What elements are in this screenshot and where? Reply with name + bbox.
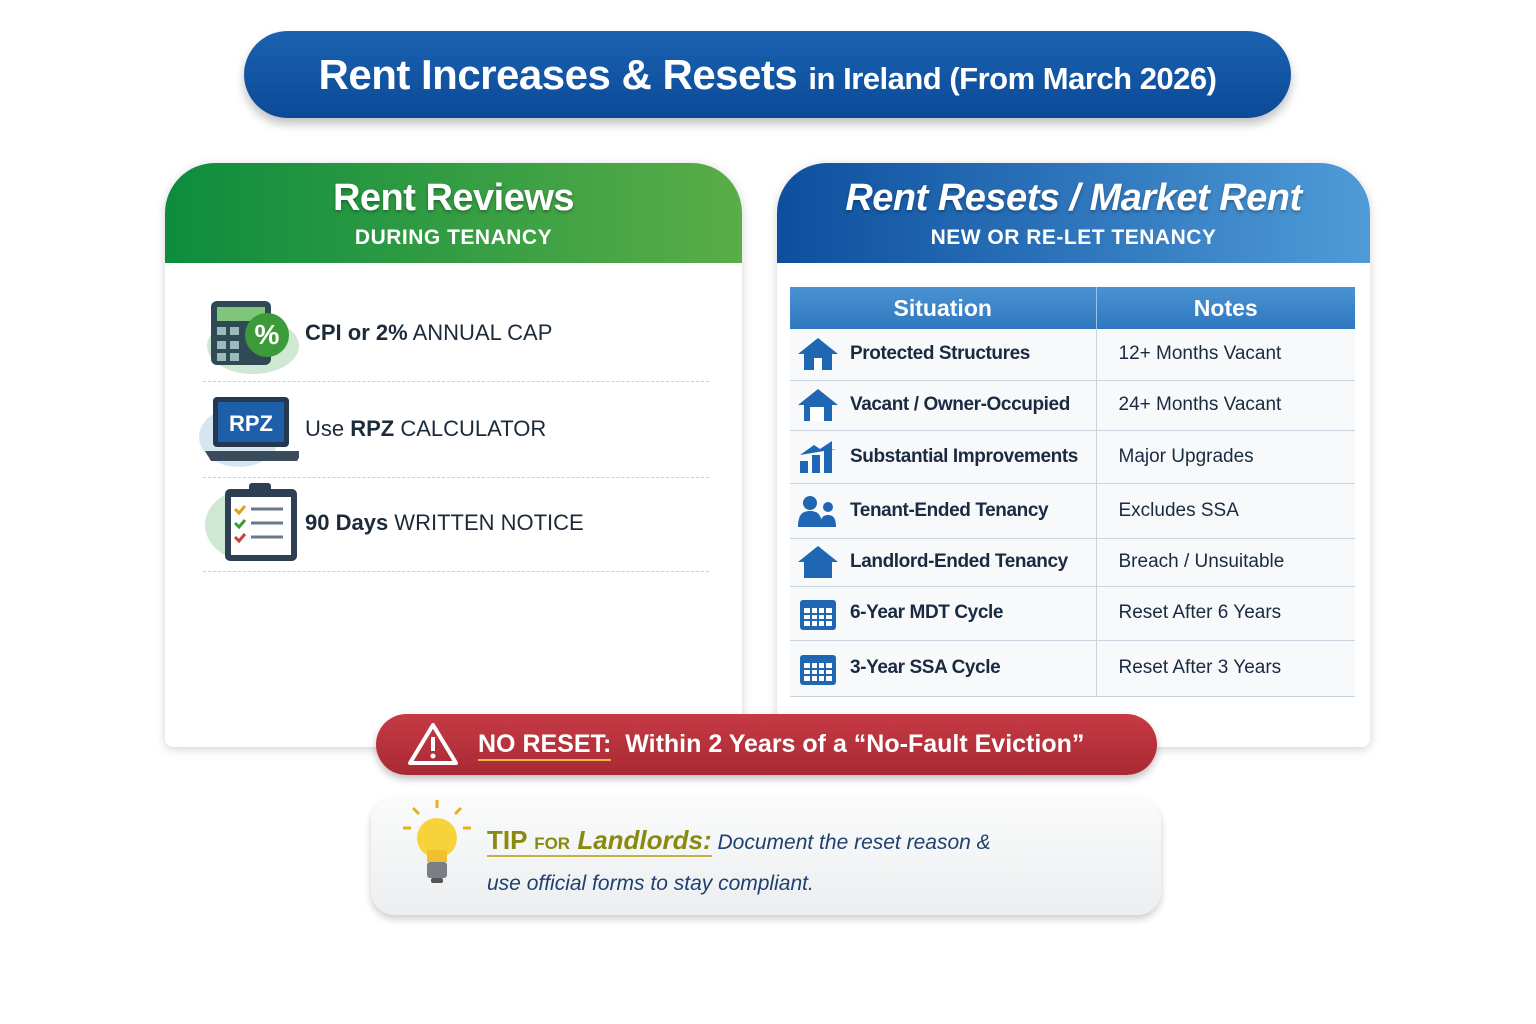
table: situations: Landlord-Ended Tenancy [850,551,1068,572]
table: situations: Substantial Improvements [850,446,1078,466]
table: situations: 6-Year MDT Cycle [850,602,1003,623]
panel: rent reviews [165,163,742,747]
item: RPZ calculator: Use RPZ CALCULATOR [305,416,546,441]
heading: rent reviews: Rent Reviews [333,177,574,219]
heading: rent resets [777,163,1370,263]
panel: rent resets [777,163,1370,747]
table: situations: Tenant-Ended Tenancy [850,500,1048,520]
heading: rent reviews [165,163,742,263]
table: situations: Vacant / Owner-Occupied [850,394,1070,415]
callout: tip [371,798,1161,915]
callout: no reset: NO RESET: [478,730,611,758]
text: tip: TIP FOR Landlords: Document the reset reason & [487,825,991,855]
table: situations: Excludes SSA [1118,500,1239,520]
table: situations: Situation [894,294,992,320]
item: RPZ calculator: RPZ [229,411,273,436]
table: situations: 3-Year SSA Cycle [850,657,1000,678]
table: situations: Reset After 6 Years [1118,602,1281,623]
item: 90 days notice [205,483,584,561]
callout: no reset: Within 2 Years of a “No-Fault Eviction” [625,730,1084,758]
table: situations: Major Upgrades [1118,446,1254,466]
item: CPI cap: % [255,319,280,350]
icon: warning [408,722,458,765]
heading: rent resets: NEW OR RE-LET TENANCY [931,226,1216,249]
table: situations: Reset After 3 Years [1118,657,1281,678]
item: 90 days notice: 90 Days WRITTEN NOTICE [305,510,584,535]
item: RPZ calculator [199,397,546,467]
text: tip: use official forms to stay compliant. [487,872,814,895]
text: tip [487,825,991,895]
table: situations: 24+ Months Vacant [1118,394,1281,415]
item: CPI cap [207,301,552,374]
title: Rent Increases & Resets in Ireland (From March 2026) [318,51,1216,98]
title [244,31,1291,118]
item: CPI cap: CPI or 2% ANNUAL CAP [305,320,552,345]
heading: rent reviews: DURING TENANCY [355,226,552,249]
table: situations [790,287,1355,697]
heading: rent resets: Rent Resets / Market Rent [845,177,1302,219]
table: situations: 12+ Months Vacant [1118,343,1281,364]
callout: no reset [376,714,1157,775]
icon: lightbulb [403,800,471,883]
table: situations: Notes [1194,294,1258,320]
table: situations: Protected Structures [850,343,1030,364]
table: situations: Breach / Unsuitable [1118,551,1284,572]
